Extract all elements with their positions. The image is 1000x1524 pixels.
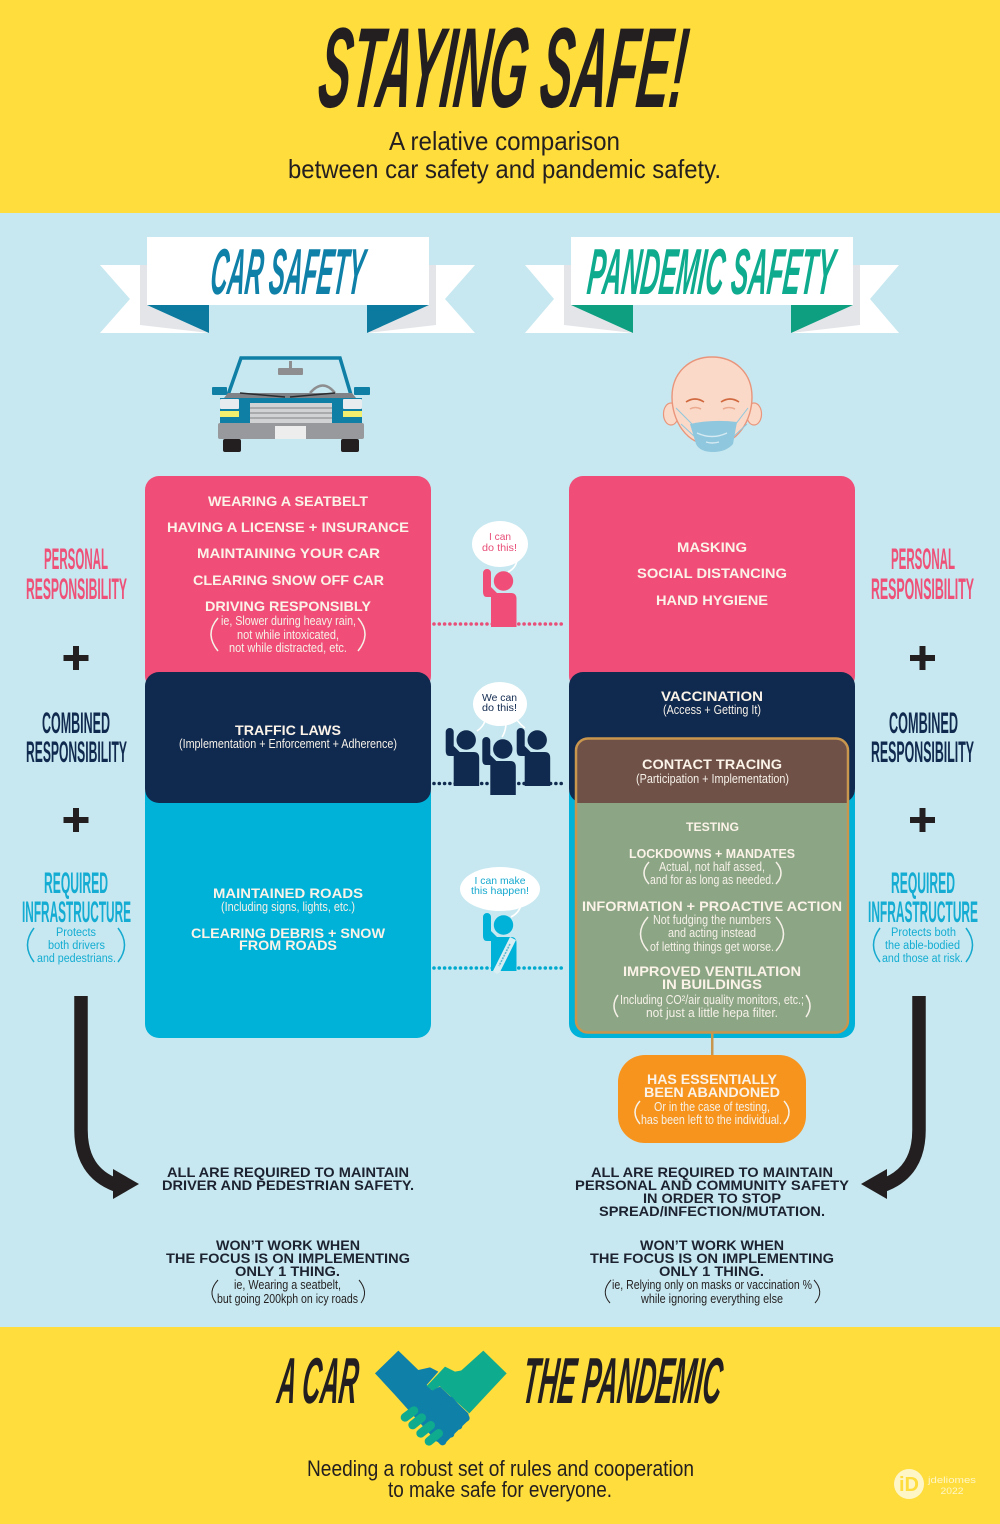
label: required infrastructure: Protects (56, 927, 96, 939)
panel: abandoned measures: not just a little hepa filter. (646, 1005, 778, 1020)
panel: car personal responsibility: not while distracted, etc. (229, 640, 347, 655)
panel: abandoned measures: IMPROVED VENTILATION (623, 963, 801, 979)
panel: car required infrastructure: FROM ROADS (239, 937, 337, 953)
icon: plus (910, 808, 935, 832)
text block: car caveat (166, 1237, 410, 1306)
panel: car personal responsibility: DRIVING RESPONSIBLY (205, 598, 372, 614)
callout: has essentially been abandoned: HAS ESSENTIALLY (647, 1071, 778, 1087)
text: RESPONSIBILITY (26, 736, 127, 769)
arrow: left curved (81, 996, 139, 1199)
text block: car conclusion: DRIVER AND PEDESTRIAN SAFETY. (162, 1177, 414, 1193)
icon: group of people with bubble: do this! (482, 702, 517, 714)
panel: pandemic combined responsibility: VACCINATION (661, 688, 763, 704)
callout: has essentially been abandoned: has been left to the individual. (641, 1112, 782, 1127)
panel: car required infrastructure: MAINTAINED ROADS (213, 885, 363, 901)
panel: car personal responsibility: not while intoxicated, (237, 627, 339, 642)
panel: pandemic safety stack (569, 476, 855, 1038)
ribbon: car safety: CAR SAFETY (208, 235, 370, 308)
panel: abandoned measures: CONTACT TRACING (642, 756, 782, 772)
text block: car caveat: WON’T WORK WHEN (216, 1237, 360, 1253)
closing text: Needing a robust set of rules and cooperation (307, 1456, 694, 1481)
panel: car personal responsibility: CLEARING SNOW OFF CAR (193, 572, 384, 588)
label: combined responsibility: COMBINED (42, 707, 110, 740)
label: required infrastructure: and those at risk. (882, 953, 963, 965)
panel: car required infrastructure: CLEARING DEBRIS + SNOW (191, 925, 386, 941)
left labels: PERSONAL (44, 543, 108, 576)
left labels (22, 543, 131, 965)
panel: car personal responsibility: WEARING A SEATBELT (208, 493, 368, 509)
subtitle (288, 126, 721, 184)
panel: car required infrastructure (145, 780, 431, 1038)
icon: plus (910, 646, 935, 670)
label: required infrastructure (22, 867, 131, 965)
icon: group of people with bubble (446, 682, 550, 795)
text block: car conclusion (162, 1164, 414, 1193)
text: RESPONSIBILITY (26, 573, 127, 606)
text block: car caveat: but going 200kph on icy roads (217, 1291, 358, 1306)
logo: jdeliomes: 2022 (940, 1486, 964, 1497)
icon: single person with bubble: I can (489, 531, 511, 543)
label: required infrastructure: Protects both (891, 927, 956, 939)
connector: combined dotted line (434, 782, 566, 785)
callout: has essentially been abandoned: Or in the case of testing, (654, 1099, 770, 1114)
panel: pandemic combined responsibility: (Access + Getting It) (663, 702, 761, 717)
panel: pandemic personal responsibility: HAND HYGIENE (656, 592, 768, 608)
text block: pandemic conclusion: ALL ARE REQUIRED TO MAINTAIN (591, 1164, 833, 1180)
panel: abandoned measures: and acting instead (668, 925, 756, 940)
panel: pandemic personal responsibility (569, 476, 855, 690)
ribbon: pandemic safety (525, 235, 899, 333)
text: INFRASTRUCTURE (22, 896, 131, 929)
panel: pandemic combined responsibility (569, 672, 855, 803)
label: combined responsibility (26, 707, 127, 769)
text block: pandemic conclusion: IN ORDER TO STOP (643, 1190, 781, 1206)
panel: car personal responsibility (145, 476, 431, 690)
text block: car caveat: ONLY 1 THING. (235, 1263, 340, 1279)
panel: car personal responsibility: ie, Slower during heavy rain, (221, 613, 356, 628)
icon: masked face (664, 357, 762, 452)
label: required infrastructure (868, 867, 978, 965)
text block: pandemic caveat (590, 1237, 834, 1306)
label: personal responsibility (871, 543, 974, 606)
panel: car personal responsibility: MAINTAINING YOUR CAR (197, 545, 380, 561)
label: required infrastructure: the able-bodied (885, 940, 960, 952)
icon: plus (64, 646, 88, 670)
text block: pandemic caveat: ONLY 1 THING. (659, 1263, 764, 1279)
closing text: to make safe for everyone. (388, 1477, 612, 1502)
panel: car required infrastructure: (Including signs, lights, etc.) (221, 899, 355, 914)
label: combined responsibility (871, 707, 974, 769)
panel: pandemic personal responsibility: MASKING (677, 539, 747, 555)
text block: pandemic caveat: ie, Relying only on masks or vaccination % (612, 1277, 812, 1292)
icon: single person with bubble: do this! (482, 542, 517, 554)
label: required infrastructure: both drivers (48, 940, 105, 952)
icon: plus (64, 808, 88, 832)
icon: car front (212, 358, 370, 452)
callout: has essentially been abandoned (618, 1033, 806, 1143)
text block: pandemic conclusion: SPREAD/INFECTION/MUTATION. (599, 1203, 825, 1219)
icon: handshake (375, 1351, 507, 1443)
panel: abandoned measures: Including CO²/air quality monitors, etc.; (620, 992, 804, 1007)
text block: car caveat: ie, Wearing a seatbelt, (234, 1277, 341, 1292)
icon: group of people with bubble: We can (482, 692, 517, 704)
icon: single person with bubble (472, 521, 528, 627)
connector: personal dotted line (434, 622, 566, 626)
panel: abandoned measures: and for as long as needed. (650, 872, 774, 887)
text block: car caveat: THE FOCUS IS ON IMPLEMENTING (166, 1250, 410, 1266)
panel: abandoned measures: IN BUILDINGS (662, 976, 762, 992)
closing text (307, 1456, 694, 1502)
label: required infrastructure: REQUIRED (44, 867, 108, 900)
panel: abandoned measures: INFORMATION + PROACTIVE ACTION (582, 898, 842, 914)
header band (0, 0, 1000, 213)
subtitle: A relative comparison (389, 126, 620, 156)
logo: jdeliomes (894, 1469, 976, 1499)
text block: car conclusion: ALL ARE REQUIRED TO MAINTAIN (167, 1164, 409, 1180)
text block: pandemic conclusion: PERSONAL AND COMMUNITY SAFETY (575, 1177, 850, 1193)
panel: abandoned measures: of letting things get worse. (650, 939, 774, 954)
label: required infrastructure: and pedestrians. (37, 953, 116, 965)
icon: official with sash and bubble: this happen! (471, 885, 529, 897)
panel: car personal responsibility: HAVING A LICENSE + INSURANCE (167, 519, 409, 535)
text block: pandemic caveat: THE FOCUS IS ON IMPLEMENTING (590, 1250, 834, 1266)
right labels (868, 543, 978, 965)
panel: abandoned measures (576, 738, 848, 1032)
arrow: right curved (861, 996, 919, 1199)
panel: pandemic infrastructure base (569, 780, 855, 1038)
footer band: A CAR (274, 1344, 362, 1417)
text block: pandemic caveat: while ignoring everything else (640, 1291, 783, 1306)
ribbon: car safety (100, 235, 475, 333)
footer band (0, 1327, 1000, 1524)
panel: car combined responsibility (145, 672, 431, 803)
panel: car safety stack (145, 476, 431, 1038)
panel: abandoned measures: TESTING (686, 820, 739, 834)
text block: pandemic caveat: WON’T WORK WHEN (640, 1237, 784, 1253)
callout: has essentially been abandoned: BEEN ABANDONED (644, 1084, 780, 1100)
icon: official with sash and bubble (460, 867, 540, 974)
logo: jdeliomes: iD (899, 1474, 919, 1496)
panel: car combined responsibility: TRAFFIC LAWS (235, 722, 341, 738)
text block: pandemic conclusion (575, 1164, 850, 1219)
label: personal responsibility (26, 543, 127, 606)
panel: abandoned measures: LOCKDOWNS + MANDATES (629, 847, 795, 861)
panel: abandoned measures: Not fudging the numbers (653, 912, 771, 927)
icon: official with sash and bubble: I can make (474, 875, 526, 887)
panel: abandoned measures: (Participation + Implementation) (636, 771, 789, 786)
panel: car combined responsibility: (Implementation + Enforcement + Adherence) (179, 736, 397, 751)
panel: abandoned measures: Actual, not half assed, (659, 859, 765, 874)
panel: pandemic personal responsibility: SOCIAL DISTANCING (637, 565, 787, 581)
subtitle: between car safety and pandemic safety. (288, 154, 721, 184)
connector: infrastructure dotted line (434, 966, 566, 970)
logo: jdeliomes: jdeliomes (927, 1475, 976, 1486)
